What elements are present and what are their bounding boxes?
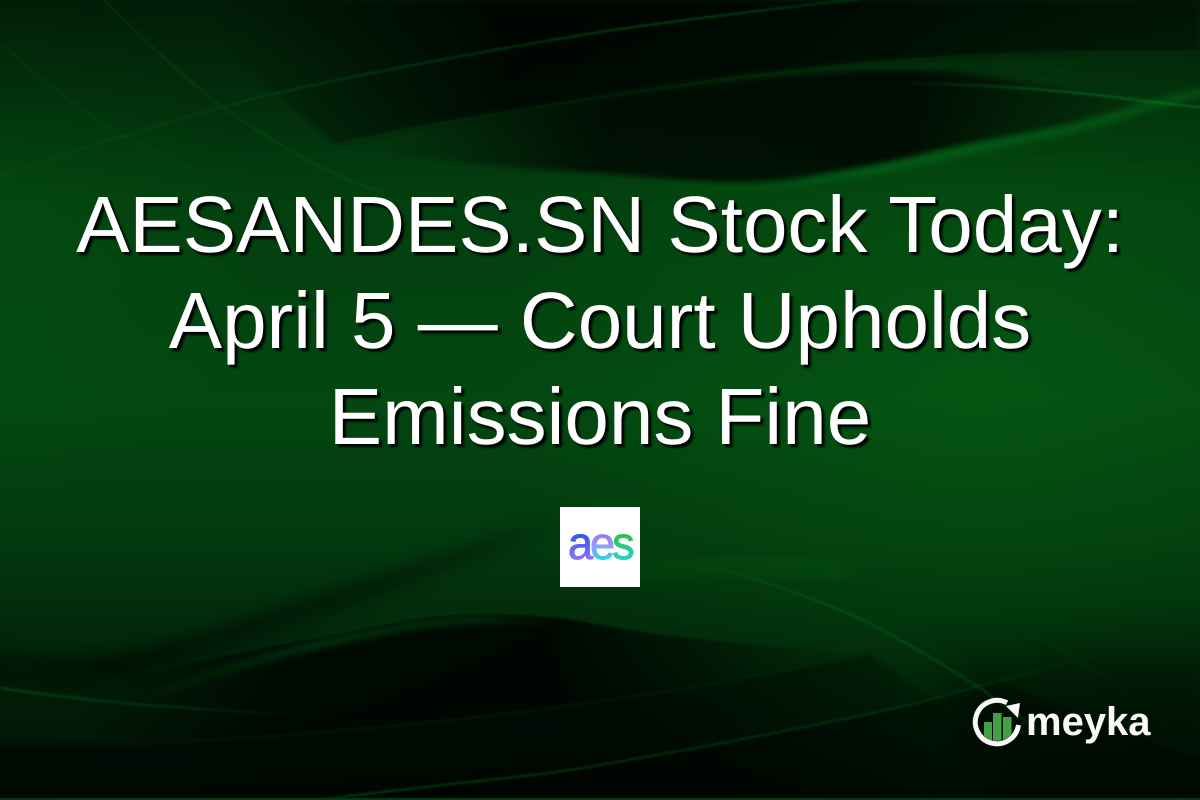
dark: top wedge [170,0,1200,145]
wordmark: meyka [1026,700,1151,744]
title line 3: Emissions Fine [329,372,871,461]
light: glow bands [640,88,1200,187]
company logo: aes [560,507,640,587]
bottom edge strip [0,798,1200,800]
dark: lower lens [76,614,868,745]
dark: bottom band [0,653,1080,800]
title line 1: AESANDES.SN Stock Today: [76,180,1124,269]
dark: smear above green band [40,522,560,673]
brand: meyka logo [972,698,1151,746]
dark: upper lens [337,70,1136,183]
dark: bottom right fade [929,655,1200,800]
dark: below bottom streak [325,682,1200,800]
company logo: aes: aes [568,518,633,569]
title line 2: April 5 — Court Upholds [169,276,1031,365]
icon: growth ring with bars [975,700,1020,746]
